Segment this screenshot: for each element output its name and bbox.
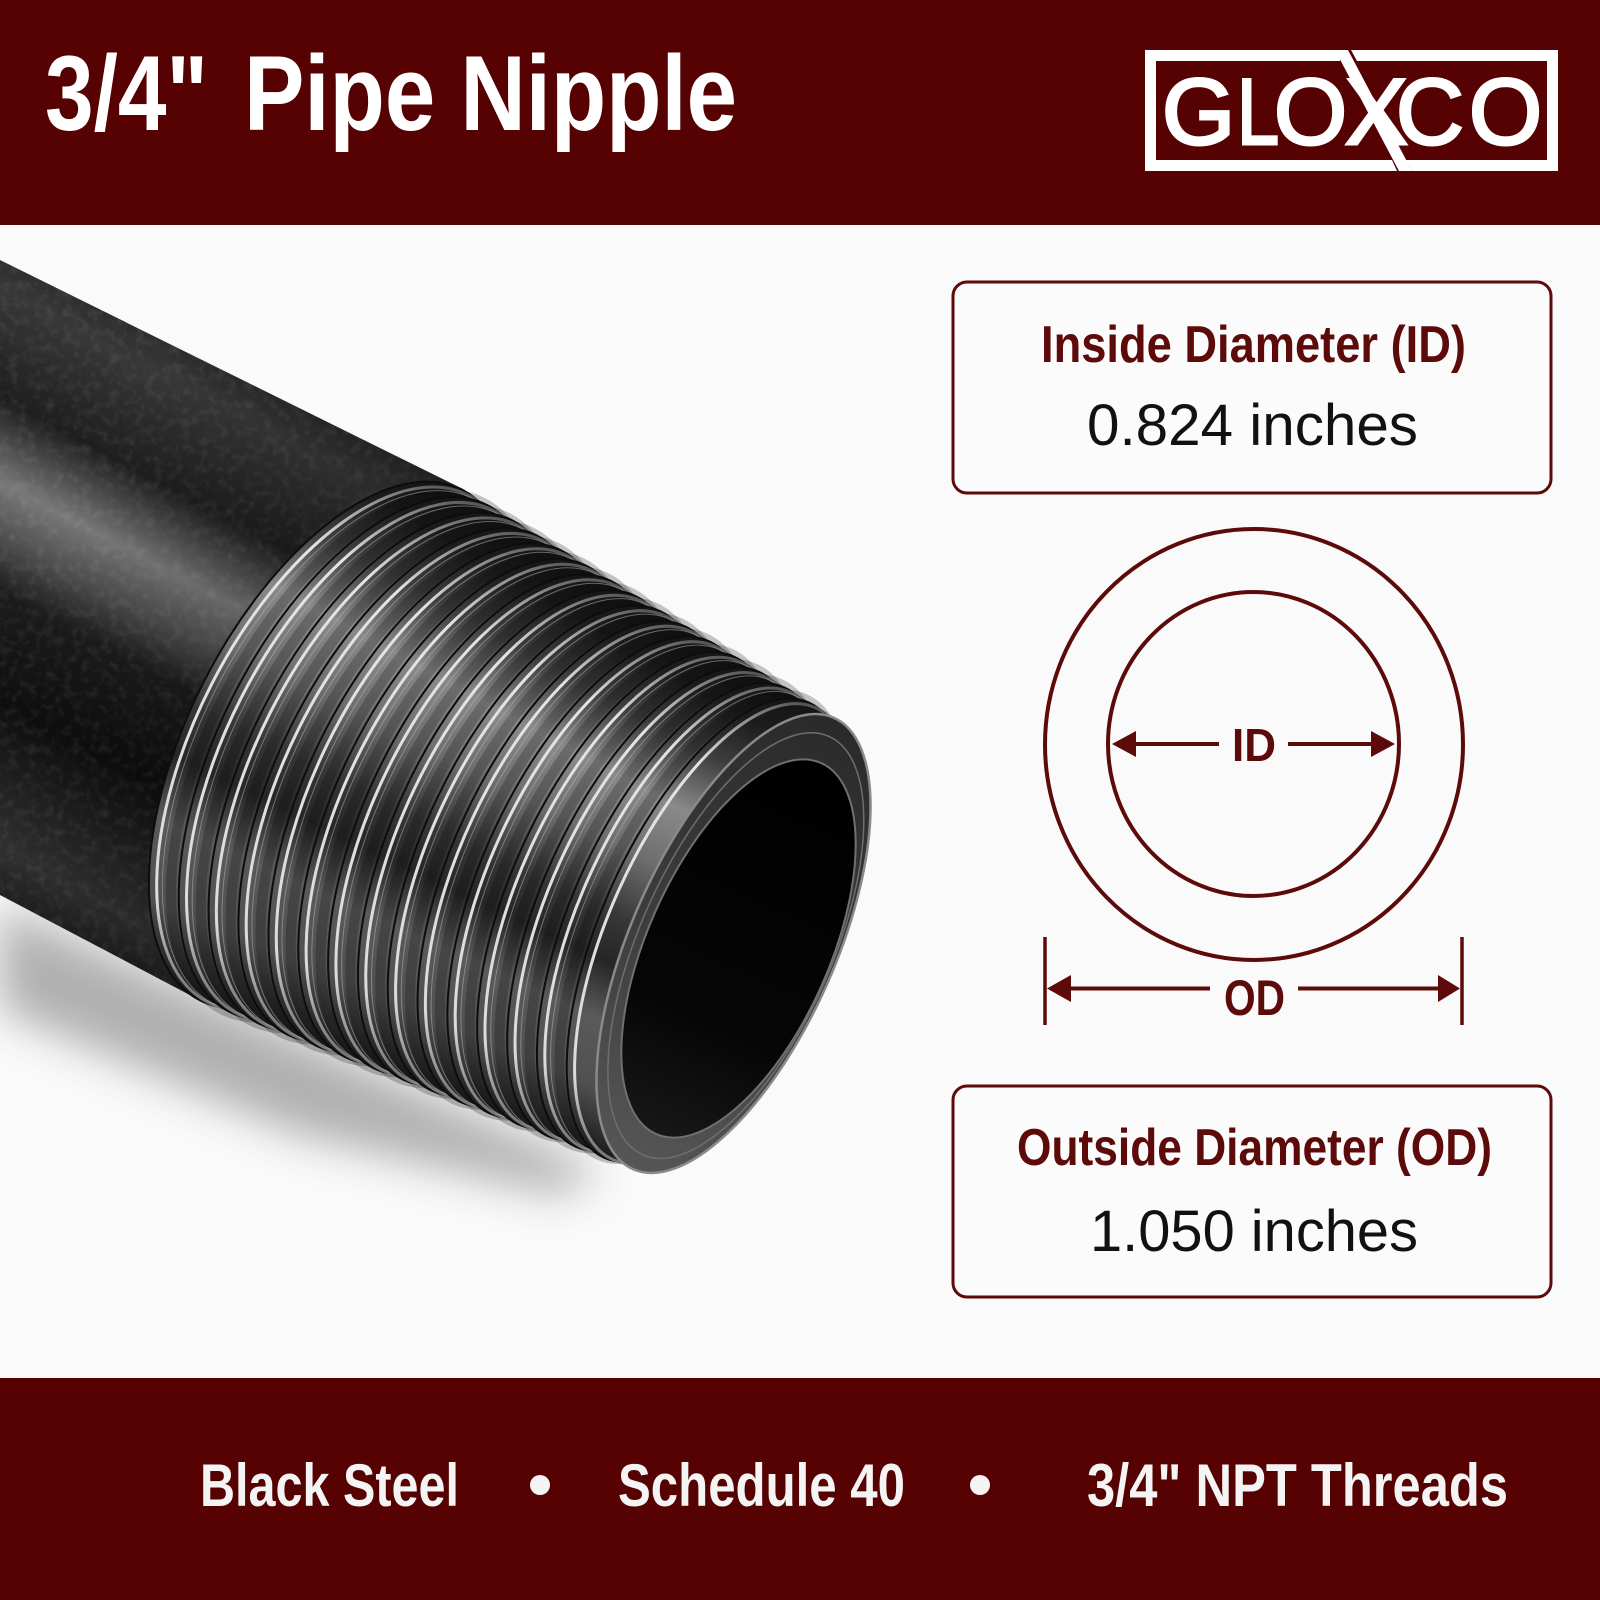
title: 3/4" [45, 33, 208, 153]
outside diameter label: Outside Diameter (OD) [1017, 1119, 1492, 1177]
pipe end face and bore [540, 676, 927, 1211]
logo: GLOXCO: G [1162, 59, 1235, 164]
pipe body [0, 260, 465, 1003]
inside diameter label: Inside Diameter (ID) [1041, 316, 1466, 374]
panel: inside diameter [953, 282, 1551, 493]
title: Pipe Nipple [244, 33, 737, 153]
OD dimension arrow: OD [1224, 970, 1285, 1026]
OD dimension arrow [1045, 937, 1462, 1026]
bullet [970, 1475, 990, 1495]
photo: black steel pipe nipple [0, 260, 927, 1211]
threaded section [74, 425, 912, 1204]
diagram: pipe cross-section [1045, 529, 1463, 1026]
feature: NPT threads: 3/4" NPT Threads [1087, 1452, 1508, 1519]
ID dimension arrow [1112, 719, 1395, 771]
inner circle [1108, 592, 1399, 896]
logo: GLOXCO: OXCO [1274, 59, 1542, 164]
outside diameter value: 1.050 inches [1090, 1199, 1418, 1264]
logo: GLOXCO [1145, 50, 1558, 171]
ID dimension arrow: ID [1232, 719, 1276, 771]
title [45, 33, 737, 153]
panel: outside diameter [953, 1086, 1551, 1297]
feature: schedule 40: Schedule 40 [618, 1452, 905, 1519]
outer circle [1045, 529, 1463, 960]
inside diameter value: 0.824 inches [1087, 393, 1418, 458]
bullet [530, 1475, 550, 1495]
logo: GLOXCO: L [1237, 59, 1279, 164]
footer band [0, 1378, 1600, 1600]
pipe shadow [0, 905, 600, 1195]
feature: black steel: Black Steel [200, 1452, 459, 1519]
header band [0, 0, 1600, 225]
